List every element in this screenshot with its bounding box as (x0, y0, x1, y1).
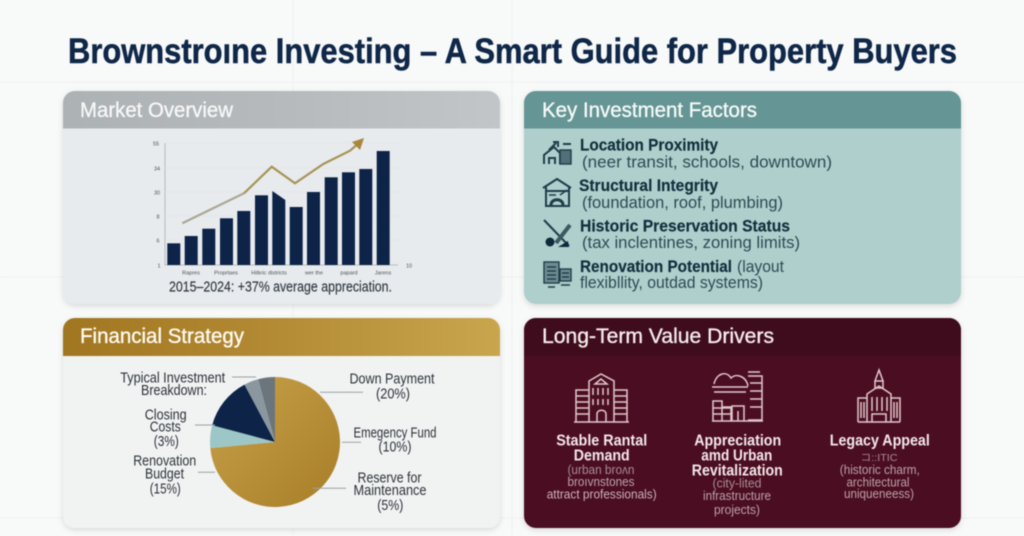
text: historic preservation (580, 217, 800, 252)
icon: historic hall (858, 370, 900, 422)
text: location proximity: Location Proximity (580, 136, 718, 155)
text: appreciation: (city-lited (712, 476, 762, 491)
pie labels left: (15%) (150, 481, 181, 497)
bar chart: Jarens (375, 270, 392, 276)
text: structural integrity: Structural Integrity (579, 176, 718, 195)
text: legacy appeal (830, 433, 930, 501)
bar chart: Proprtaes (214, 270, 238, 276)
text: appreciation (692, 433, 783, 517)
text: renovation potential: (layout (737, 257, 784, 276)
pie labels left: Costs (150, 420, 181, 436)
icon: tools (544, 220, 570, 247)
panel: key investment factors (524, 91, 961, 304)
text: legacy appeal: コ::ITIC (860, 453, 898, 464)
heading band: market overview: Market Overview (80, 98, 233, 122)
bar chart: Hitkric districts (251, 270, 287, 276)
icon: structural (543, 179, 571, 206)
text: renovation potential: Renovation Potential (580, 257, 732, 276)
pie chart (210, 377, 340, 507)
pie labels left: Budget (145, 466, 184, 482)
panel: market overview (63, 91, 500, 304)
chart caption: 2015–2024: +37% average appreciation. (169, 278, 392, 296)
pie labels right: Down Payment (350, 371, 434, 387)
text: legacy appeal: architectural (846, 475, 910, 490)
text: historic preservation: (tax inclentines, zoning limits) (582, 233, 800, 252)
pie labels right: (10%) (378, 440, 412, 456)
pie labels right: Reserve for (358, 470, 422, 486)
panel: long-term value drivers (524, 318, 961, 528)
text: legacy appeal: Legacy Appeal (830, 433, 930, 450)
text: stable rental demand (547, 433, 657, 501)
pie labels right (350, 371, 436, 514)
pie labels left: Breakdown: (141, 383, 207, 399)
bar chart: 10 (406, 264, 412, 270)
bar chart: wer the (304, 270, 323, 276)
icon: renovation (544, 262, 571, 287)
icon: urban skyline (712, 372, 763, 421)
pie labels left: Renovation (133, 454, 196, 470)
heading band: key investment factors: Key Investment Factors (542, 98, 757, 122)
text: legacy appeal: (historic charm, (840, 462, 920, 477)
heading band: financial strategy: Financial Strategy (80, 324, 244, 348)
text: renovation potential: flexibllity, outdad systems) (580, 273, 763, 292)
heading band: key investment factors (524, 91, 961, 128)
icon: apartment building (574, 374, 629, 422)
text: location proximity (580, 136, 832, 172)
text: structural integrity (579, 176, 783, 212)
pie labels right: Maintenance (354, 483, 426, 499)
text: location proximity: (neer transit, schools, downtown) (582, 153, 832, 172)
text: stable rental demand: Stable Rantal (556, 433, 647, 450)
bar chart: 34 (154, 166, 160, 172)
pie labels right: (20%) (376, 386, 410, 402)
text: stable rental demand: attract professionals) (547, 486, 657, 501)
text: stable rental demand: broıvnstones (568, 474, 635, 489)
bar chart: 30 (154, 190, 160, 196)
pie labels left: (3%) (154, 434, 179, 450)
text: historic preservation: Historic Preservation Status (580, 217, 790, 236)
pie labels left: Closing (145, 407, 187, 423)
icon: location (544, 142, 571, 164)
text: stable rental demand: (urban broʌn (568, 462, 634, 477)
bar chart: papard (340, 270, 358, 276)
text: stable rental demand: Demand (574, 448, 630, 465)
text: legacy appeal: uniqueneess) (844, 486, 914, 501)
heading band: long-term value drivers: Long-Term Value Drivers (542, 324, 774, 348)
text: appreciation: amd Urban (701, 448, 772, 465)
pie labels right: (5%) (377, 498, 403, 514)
pie labels left: Typical Investment (120, 371, 225, 387)
trend arrow (182, 138, 364, 223)
bar chart: 8 (156, 214, 160, 220)
text: appreciation: infrastructure (703, 488, 771, 503)
bar chart: 55 (153, 142, 159, 148)
bar chart: 6 (156, 238, 160, 244)
panel: financial strategy (63, 318, 500, 528)
heading band: market overview (63, 91, 500, 128)
text: appreciation: Appreciation (694, 433, 781, 450)
text: renovation potential (580, 257, 784, 292)
bar chart: 1 (157, 264, 161, 270)
heading band: financial strategy (63, 318, 500, 356)
text: appreciation: projects) (714, 502, 760, 517)
pie labels right: Emegency Fund (354, 425, 436, 441)
bar chart: Rapres (182, 270, 200, 276)
bar chart (153, 138, 412, 276)
heading band: long-term value drivers (524, 318, 961, 356)
text: structural integrity: (foundation, roof, plumbing) (582, 193, 783, 212)
pie labels left (120, 371, 225, 497)
text: appreciation: Revitalization (692, 463, 783, 480)
